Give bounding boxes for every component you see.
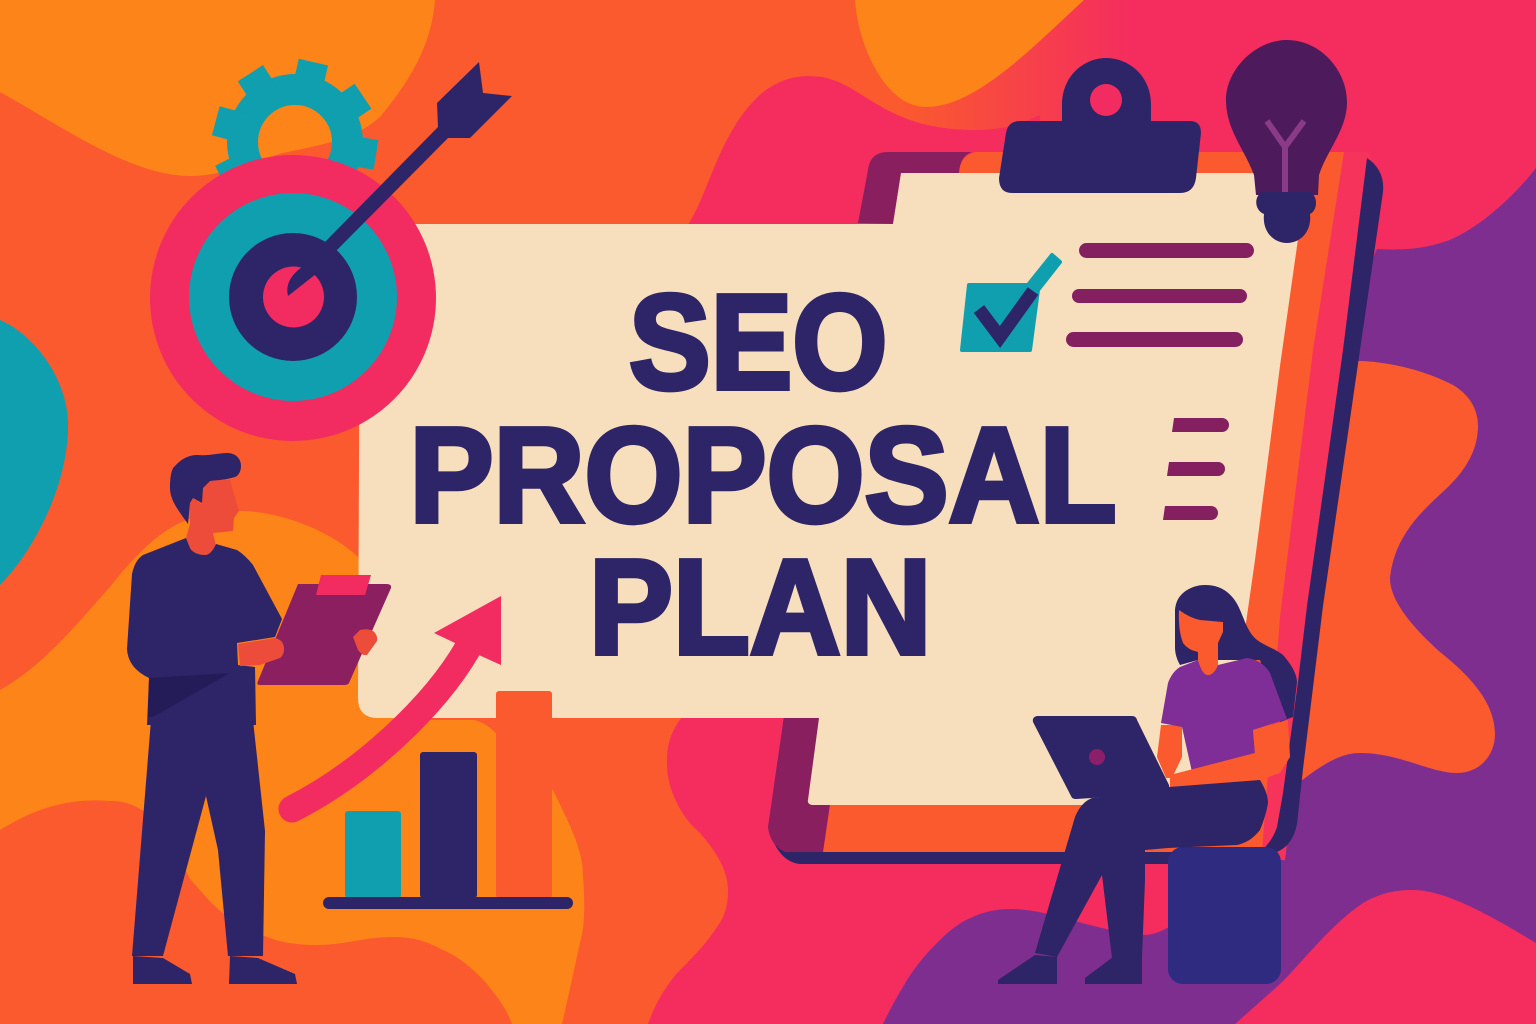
clipboard pink edge (1100, 152, 1380, 860)
icon: light bulb (1226, 40, 1347, 243)
cream panel (358, 173, 1300, 805)
man hair (170, 453, 241, 524)
bar chart (323, 691, 573, 909)
stool (1168, 847, 1281, 984)
icon: target with arrow (150, 62, 512, 441)
clipboard illustration with cream sheet (358, 152, 1383, 864)
woman shoes (998, 955, 1142, 984)
clipboard orange layer (823, 152, 1344, 852)
woman far arm (1157, 725, 1182, 778)
checklist lines (1066, 243, 1254, 347)
clipboard clip (316, 575, 371, 595)
woman hair (1175, 585, 1297, 722)
man torso shadow (148, 673, 230, 717)
arrow: growth (292, 596, 501, 809)
title: PLAN (589, 532, 932, 682)
checklist (962, 243, 1254, 350)
figure: man with clipboard (127, 453, 391, 984)
man shoes (133, 956, 297, 984)
clipboard navy back edge (768, 158, 1383, 864)
icon: gear (212, 59, 378, 216)
man torso (127, 538, 282, 725)
woman near arm (1170, 720, 1290, 788)
check mark (979, 291, 1033, 337)
title: SEO (629, 266, 888, 418)
man legs (132, 720, 265, 956)
clipboard maroon strips (768, 152, 972, 852)
man face and neck (186, 480, 239, 555)
checkbox (962, 255, 1060, 350)
figure: woman with laptop (998, 585, 1297, 984)
icon: clipboard clip (999, 58, 1201, 193)
woman shirt (1161, 658, 1287, 772)
title (410, 266, 1116, 682)
man clipboard (257, 584, 391, 685)
short list lines (1163, 418, 1229, 520)
woman legs (1035, 780, 1268, 958)
man hands (238, 629, 377, 666)
title: PROPOSAL (410, 400, 1116, 550)
woman face (1179, 610, 1223, 675)
laptop (1033, 716, 1169, 799)
